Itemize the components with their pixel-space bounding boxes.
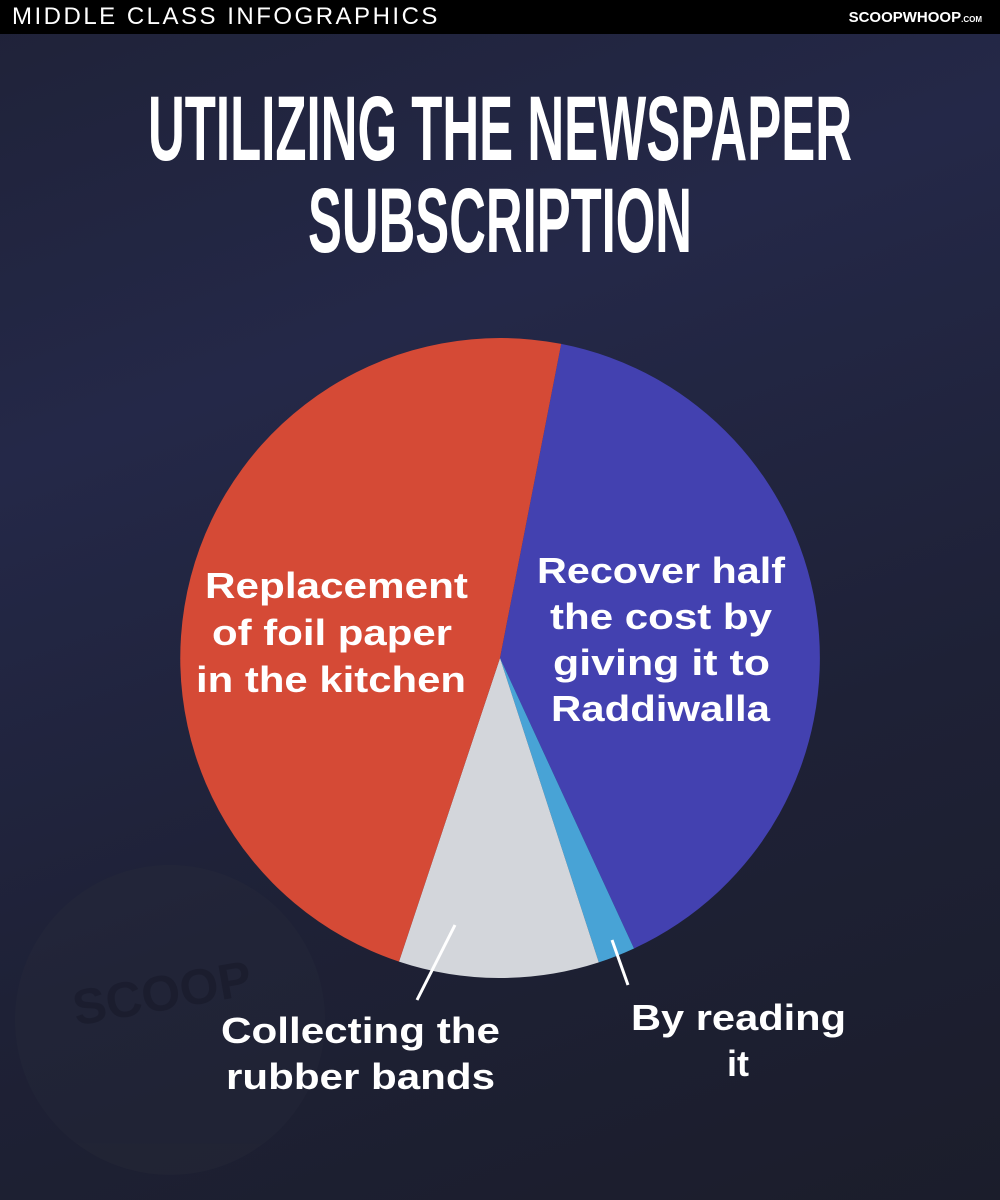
labels (196, 550, 846, 1097)
labels: giving it to (553, 642, 770, 683)
series label: MIDDLE CLASS INFOGRAPHICS (12, 3, 440, 30)
labels: Replacement (205, 565, 468, 606)
labels: By reading (631, 997, 846, 1038)
labels: Recover half (537, 550, 786, 591)
pointer lines (417, 925, 628, 1000)
pie chart (180, 338, 820, 978)
title (148, 78, 852, 272)
labels: it (727, 1043, 749, 1084)
labels: of foil paper (212, 612, 452, 653)
watermark (15, 865, 325, 1175)
slice: rubber bands (399, 658, 599, 978)
top bar (0, 0, 1000, 34)
labels: in the kitchen (196, 659, 466, 700)
labels: Collecting the (221, 1010, 500, 1051)
brand logo: SCOOPWHOOP.COM (849, 9, 982, 26)
labels: the cost by (550, 596, 772, 637)
slice: reading (500, 658, 634, 962)
slice: raddiwalla (500, 344, 820, 948)
labels: rubber bands (226, 1056, 495, 1097)
slice: foil paper (180, 338, 561, 962)
watermark: SCOOP (68, 950, 256, 1037)
labels: Raddiwalla (551, 688, 771, 729)
title: SUBSCRIPTION (308, 170, 692, 272)
